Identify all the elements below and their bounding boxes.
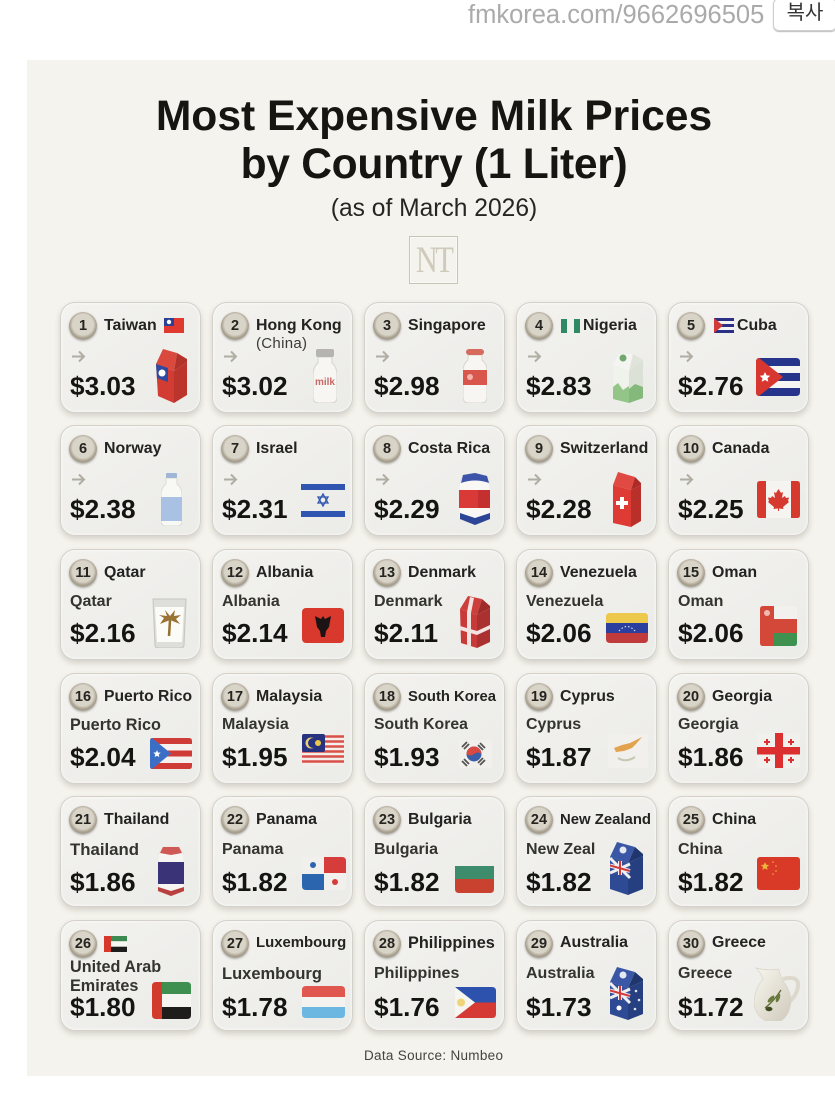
card 8: Costa Rica <box>364 425 505 536</box>
card 28: Philippines: Philippines <box>408 934 495 952</box>
icon: Canada flag <box>757 481 800 518</box>
card 20: Georgia <box>668 673 809 784</box>
card 23: Bulgaria <box>364 796 505 907</box>
arrow <box>224 350 238 362</box>
arrow <box>376 350 390 362</box>
card 26: United Arab Emirates: Emirates <box>70 976 138 994</box>
card 16: Puerto Rico <box>60 673 201 784</box>
card 17: Malaysia: Malaysia <box>256 688 322 705</box>
card 24: New Zealand: New Zeal <box>526 841 595 858</box>
icon: South Korea flag <box>462 742 486 766</box>
card 13: Denmark: Denmark <box>374 593 442 610</box>
icon: Panama flag <box>302 857 346 890</box>
copy button <box>773 0 835 31</box>
icon: China flag <box>757 857 800 890</box>
card 6: Norway: 6 <box>79 441 87 457</box>
card 22: Panama: $1.82 <box>222 867 288 897</box>
card 3: Singapore <box>364 302 505 413</box>
card 9: Switzerland: Switzerland <box>560 440 648 457</box>
card 24: New Zealand: $1.82 <box>526 867 592 897</box>
icon: Philippines flag <box>455 987 496 1018</box>
arrow <box>528 474 542 486</box>
card 12: Albania: Albania <box>222 593 280 610</box>
icon: milk glass <box>152 598 186 648</box>
card 21: Thailand: $1.86 <box>70 867 136 897</box>
icon: Cuba mini flag <box>714 318 734 333</box>
card 26: United Arab Emirates: 26 <box>75 936 91 952</box>
card 14: Venezuela <box>516 549 657 660</box>
icon: Australia carton <box>610 967 643 1020</box>
card 25: China: 25 <box>683 812 699 828</box>
icon: UAE flag <box>152 982 191 1019</box>
card 23: Bulgaria: 23 <box>379 812 395 828</box>
icon: Singapore bottle <box>463 349 487 403</box>
card 10: Canada: 10 <box>683 441 699 457</box>
card 19: Cyprus: 19 <box>531 689 547 705</box>
card 7: Israel: Israel <box>256 440 298 457</box>
card 19: Cyprus <box>516 673 657 784</box>
card 4: Nigeria: 4 <box>535 318 543 334</box>
arrow <box>680 350 694 362</box>
card 16: Puerto Rico: $2.04 <box>70 742 136 772</box>
card 4: Nigeria <box>516 302 657 413</box>
title line 1: Most Expensive Milk Prices <box>156 92 712 140</box>
icon: Oman flag <box>760 606 797 646</box>
card 21: Thailand <box>60 796 201 907</box>
card 17: Malaysia <box>212 673 353 784</box>
card 12: Albania <box>212 549 353 660</box>
card 26: United Arab Emirates: United Arab <box>70 958 161 976</box>
card 16: Puerto Rico: Puerto Rico <box>104 688 192 705</box>
card 29: Australia: Australia <box>526 965 594 982</box>
card 20: Georgia: $1.86 <box>678 742 744 772</box>
icon: Venezuela flag <box>606 613 648 643</box>
card 28: Philippines <box>364 920 505 1031</box>
card 20: Georgia: Georgia <box>712 688 772 705</box>
card 22: Panama <box>212 796 353 907</box>
card 29: Australia: $1.73 <box>526 992 592 1022</box>
card 14: Venezuela: 14 <box>531 565 547 581</box>
card 25: China: $1.82 <box>678 867 744 897</box>
card 26: United Arab Emirates: $1.80 <box>70 992 136 1022</box>
watermark url: fmkorea.com/9662696505 <box>468 1 764 29</box>
card 21: Thailand: Thailand <box>70 840 139 859</box>
card 2: Hong Kong: (China) <box>256 335 307 352</box>
card 28: Philippines: 28 <box>379 936 395 952</box>
icon: Puerto Rico flag <box>150 738 192 769</box>
card 18: South Korea <box>364 673 505 784</box>
icon: Luxembourg flag <box>302 986 345 1018</box>
icon: Malaysia flag <box>302 734 344 763</box>
icon: Israel flag <box>301 484 345 517</box>
card 25: China <box>668 796 809 907</box>
logo: NT: NT <box>416 240 451 281</box>
card 15: Oman: Oman <box>712 564 757 581</box>
card 14: Venezuela: $2.06 <box>526 618 592 648</box>
card 15: Oman <box>668 549 809 660</box>
icon: milk bottle <box>313 349 337 403</box>
card 10: Canada <box>668 425 809 536</box>
card 20: Georgia: Georgia <box>678 716 738 733</box>
card 18: South Korea: South Korea <box>408 689 496 705</box>
card 29: Australia <box>516 920 657 1031</box>
card 19: Cyprus: Cyprus <box>526 716 581 733</box>
card 29: Australia: Australia <box>560 934 628 951</box>
icon: Denmark carton <box>460 596 490 648</box>
icon: olive jug <box>754 967 800 1021</box>
card 2: Hong Kong <box>212 302 353 413</box>
icon: Nigeria carton <box>613 354 643 403</box>
card 4: Nigeria: Nigeria <box>583 317 637 334</box>
card 3: Singapore: 3 <box>383 318 391 334</box>
icon: Georgia flag <box>757 733 800 768</box>
card 15: Oman: 15 <box>683 565 699 581</box>
card 3: Singapore: $2.98 <box>374 371 440 401</box>
icon: Thailand carton <box>158 846 184 896</box>
card 17: Malaysia: $1.95 <box>222 742 288 772</box>
card 27: Luxembourg <box>212 920 353 1031</box>
data source: Data Source: Numbeo <box>364 1048 503 1063</box>
card 18: South Korea: South Korea <box>374 716 468 733</box>
arrow <box>72 474 86 486</box>
card 26: United Arab Emirates <box>60 920 201 1031</box>
icon: New Zealand carton <box>610 842 643 895</box>
card 15: Oman: Oman <box>678 593 723 610</box>
card 30: Greece: Greece <box>712 934 766 951</box>
card 11: Qatar: Qatar <box>104 564 146 581</box>
card 24: New Zealand: New Zealand <box>560 812 651 828</box>
card 30: Greece: $1.72 <box>678 992 744 1022</box>
card 28: Philippines: $1.76 <box>374 992 440 1022</box>
card 10: Canada: Canada <box>712 440 769 457</box>
card 24: New Zealand: 24 <box>531 812 547 828</box>
card 13: Denmark: Denmark <box>408 564 476 581</box>
card 6: Norway: Norway <box>104 440 161 457</box>
card 12: Albania: Albania <box>256 564 313 581</box>
card 5: Cuba: 5 <box>687 318 695 334</box>
card 1: Taiwan <box>60 302 201 413</box>
card 11: Qatar: Qatar <box>70 593 112 610</box>
card 19: Cyprus: Cyprus <box>560 688 615 705</box>
card 13: Denmark <box>364 549 505 660</box>
card 13: Denmark: 13 <box>379 565 395 581</box>
card 27: Luxembourg: Luxembourg <box>256 935 346 951</box>
card 16: Puerto Rico: Puerto Rico <box>70 716 161 734</box>
card 24: New Zealand <box>516 796 657 907</box>
card 27: Luxembourg: 27 <box>227 936 243 952</box>
card 9: Switzerland <box>516 425 657 536</box>
icon: Taiwan carton <box>156 349 187 403</box>
arrow <box>224 474 238 486</box>
icon: Bulgaria flag <box>455 866 494 893</box>
card 17: Malaysia: Malaysia <box>222 716 289 733</box>
card 22: Panama: Panama <box>222 841 283 858</box>
card 28: Philippines: Philippines <box>374 965 459 982</box>
card 2: Hong Kong: Hong Kong <box>256 317 342 334</box>
icon: Norway bottle <box>161 473 182 526</box>
card 11: Qatar <box>60 549 201 660</box>
card 5: Cuba: Cuba <box>737 317 777 334</box>
subtitle: (as of March 2026) <box>331 195 537 222</box>
card 20: Georgia: 20 <box>683 689 699 705</box>
card 1: Taiwan: Taiwan <box>104 317 157 334</box>
card 14: Venezuela: Venezuela <box>560 564 637 581</box>
card 8: Costa Rica: 8 <box>383 441 391 457</box>
icon: Cuba flag <box>756 358 800 396</box>
card 19: Cyprus: $1.87 <box>526 742 592 772</box>
icon: milk bottle: milk <box>315 377 335 388</box>
card 15: Oman: $2.06 <box>678 618 744 648</box>
logo: NT <box>409 236 458 284</box>
card 1: Taiwan: $3.03 <box>70 371 136 401</box>
title line 2: by Country (1 Liter) <box>241 140 627 188</box>
card 23: Bulgaria: Bulgaria <box>408 811 472 828</box>
card 5: Cuba <box>668 302 809 413</box>
card 22: Panama: 22 <box>227 812 243 828</box>
card 12: Albania: 12 <box>227 565 243 581</box>
card 23: Bulgaria: Bulgaria <box>374 841 438 858</box>
copy button: 복사 <box>787 2 823 24</box>
card 7: Israel <box>212 425 353 536</box>
card 29: Australia: 29 <box>531 936 547 952</box>
card 7: Israel: $2.31 <box>222 494 288 524</box>
card 11: Qatar: 11 <box>75 565 91 581</box>
card 3: Singapore: Singapore <box>408 317 486 334</box>
icon: Switzerland carton <box>613 472 641 527</box>
arrow <box>376 474 390 486</box>
card 2: Hong Kong: 2 <box>231 318 239 334</box>
card 6: Norway <box>60 425 201 536</box>
card 9: Switzerland: $2.28 <box>526 494 592 524</box>
card 27: Luxembourg: Luxembourg <box>222 965 322 983</box>
card 13: Denmark: $2.11 <box>374 618 438 648</box>
card 27: Luxembourg: $1.78 <box>222 992 288 1022</box>
card 22: Panama: Panama <box>256 811 317 828</box>
arrow <box>528 350 542 362</box>
card 6: Norway: $2.38 <box>70 494 136 524</box>
card 12: Albania: $2.14 <box>222 618 288 648</box>
card 1: Taiwan: 1 <box>79 318 87 334</box>
card 23: Bulgaria: $1.82 <box>374 867 440 897</box>
card 18: South Korea: 18 <box>379 689 395 705</box>
icon: Albania flag <box>302 608 344 643</box>
card 5: Cuba: $2.76 <box>678 371 744 401</box>
card 30: Greece: 30 <box>683 936 699 952</box>
card 8: Costa Rica: Costa Rica <box>408 440 490 457</box>
icon: Costa Rica carton <box>459 473 490 525</box>
card 30: Greece <box>668 920 809 1031</box>
card 7: Israel: 7 <box>231 441 239 457</box>
arrow <box>680 474 694 486</box>
card 21: Thailand: 21 <box>75 812 91 828</box>
card 25: China: China <box>712 811 756 828</box>
card 30: Greece: Greece <box>678 965 732 982</box>
card 17: Malaysia: 17 <box>227 689 243 705</box>
card 14: Venezuela: Venezuela <box>526 593 603 610</box>
icon: Nigeria mini flag <box>561 319 580 333</box>
card 9: Switzerland: 9 <box>535 441 543 457</box>
card 11: Qatar: $2.16 <box>70 618 136 648</box>
card 8: Costa Rica: $2.29 <box>374 494 440 524</box>
card 25: China: China <box>678 841 722 858</box>
card 4: Nigeria: $2.83 <box>526 371 592 401</box>
icon: Cyprus flag <box>614 737 642 762</box>
card 2: Hong Kong: $3.02 <box>222 371 288 401</box>
icon: UAE mini flag <box>104 936 127 952</box>
arrow <box>72 350 86 362</box>
card 10: Canada: $2.25 <box>678 494 744 524</box>
card 21: Thailand: Thailand <box>104 811 169 828</box>
card 16: Puerto Rico: 16 <box>75 689 91 705</box>
card 18: South Korea: $1.93 <box>374 742 440 772</box>
